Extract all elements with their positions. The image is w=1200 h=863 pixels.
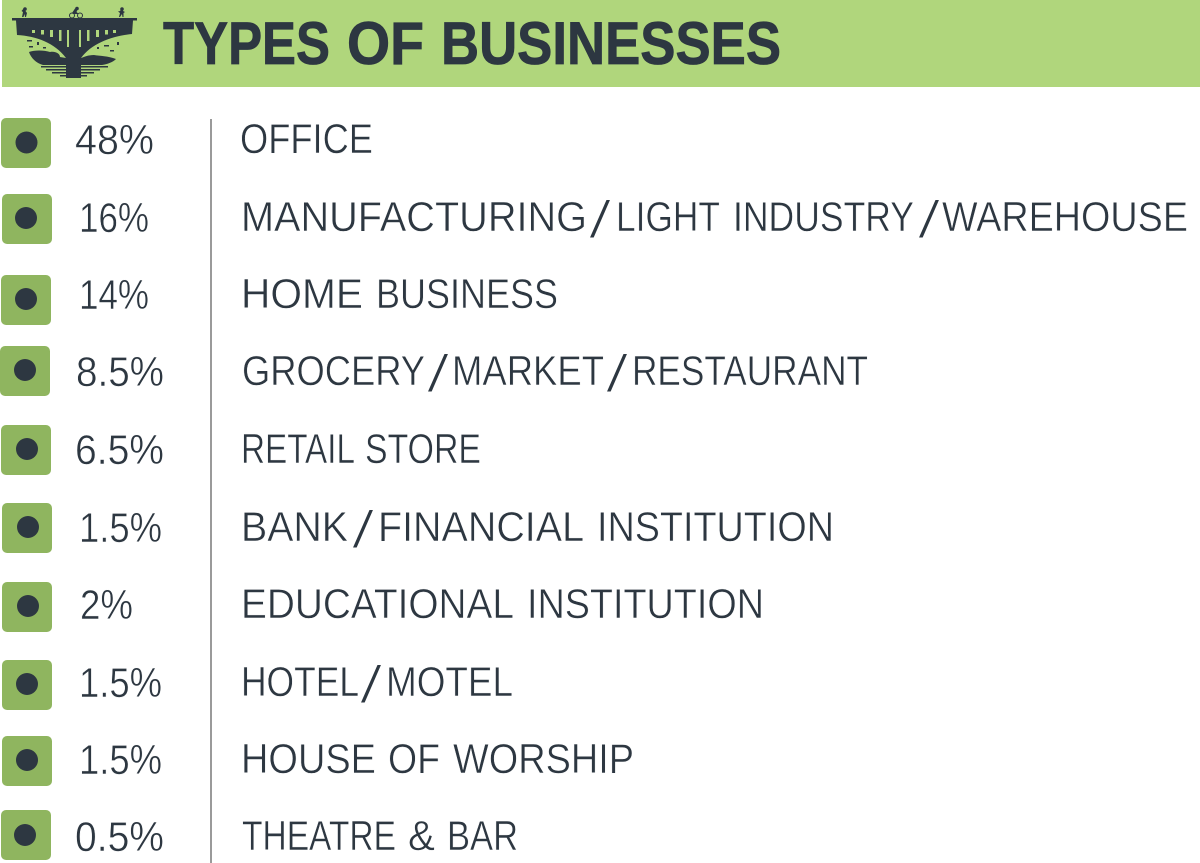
row: worship: WORSHIP [453, 735, 634, 782]
row: manufacturing [2, 190, 1188, 250]
row: manufacturing: 16% [79, 194, 149, 241]
row: manufacturing: / [917, 190, 941, 250]
row: office [1, 115, 373, 168]
row: manufacturing: LIGHT [616, 193, 720, 240]
row: retail [1, 425, 481, 475]
row: bank: 1.5% [79, 504, 162, 551]
row: theatre: 0.5% [75, 813, 164, 860]
row: bank [2, 500, 834, 560]
row: manufacturing: INDUSTRY [733, 193, 914, 240]
row: grocery: / [605, 344, 629, 404]
row: hotel: 1.5% [79, 659, 162, 706]
row: bank: / [351, 500, 375, 560]
row: theatre: & [408, 812, 435, 859]
row: grocery: 8.5% [76, 348, 164, 395]
row: worship: OF [388, 735, 440, 782]
row: bank: BANK [241, 503, 348, 550]
row: educational: EDUCATIONAL [241, 580, 514, 627]
row: educational [2, 580, 764, 632]
row: grocery [0, 344, 868, 404]
row: educational: INSTITUTION [527, 580, 764, 627]
row: hotel: HOTEL [241, 658, 359, 705]
row: worship: 1.5% [79, 736, 162, 783]
row: grocery: GROCERY [242, 347, 425, 394]
row: retail: 6.5% [75, 426, 164, 473]
row: hotel: MOTEL [386, 658, 513, 705]
row: bank: INSTITUTION [597, 503, 834, 550]
title: BUSINESSES [441, 10, 781, 77]
row: hotel: / [359, 655, 383, 715]
title [163, 10, 781, 77]
row: theatre: THEATRE [242, 812, 396, 859]
divider [210, 119, 212, 863]
row: bank: FINANCIAL [378, 503, 584, 550]
row: home business: BUSINESS [376, 270, 558, 317]
title: OF [347, 10, 424, 77]
row: office: 48% [75, 116, 154, 163]
row: office: OFFICE [240, 115, 373, 162]
row: grocery: RESTAURANT [632, 347, 868, 394]
row: retail: RETAIL [241, 425, 355, 472]
row: hotel [2, 655, 513, 715]
row: retail: STORE [365, 425, 481, 472]
icon: bridge [12, 7, 137, 78]
row: grocery: MARKET [452, 347, 604, 394]
row: worship: HOUSE [241, 735, 376, 782]
row: grocery: / [426, 344, 450, 404]
row: home business: 14% [79, 271, 149, 318]
row: educational: 2% [80, 581, 133, 628]
row: home business: HOME [241, 270, 363, 317]
row: theatre: BAR [447, 812, 518, 859]
row: manufacturing: MANUFACTURING [241, 193, 587, 240]
title: TYPES [163, 10, 330, 77]
row: theatre [1, 810, 518, 860]
row: manufacturing: / [588, 190, 612, 250]
row: home business [1, 270, 558, 325]
row: worship [2, 735, 634, 786]
header band [2, 0, 1200, 87]
